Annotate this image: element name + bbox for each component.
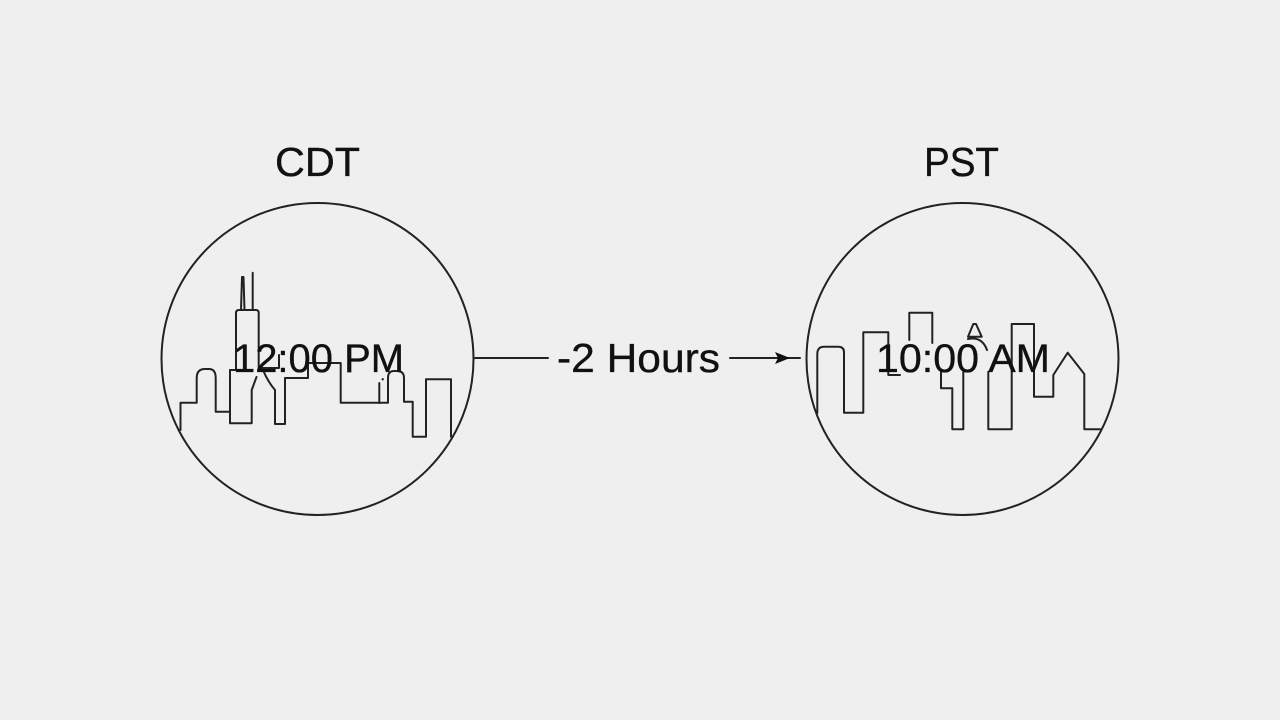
label: -2 Hours: -2 Hours	[557, 335, 720, 381]
skyline: Chicago	[180, 273, 451, 437]
panel: PST clock	[806, 139, 1118, 515]
time: 12:00 PM: 12:00 PM	[233, 337, 404, 381]
circle: PST	[806, 203, 1118, 515]
panel: CDT clock	[162, 139, 474, 515]
circle: CDT	[162, 203, 474, 515]
skyline: Los Angeles	[817, 313, 1100, 429]
heading: CDT: CDT	[275, 139, 360, 185]
heading: PST: PST	[924, 139, 999, 185]
time: 10:00 AM: 10:00 AM	[876, 337, 1050, 381]
arrow: connector with -2 Hours	[475, 335, 800, 381]
